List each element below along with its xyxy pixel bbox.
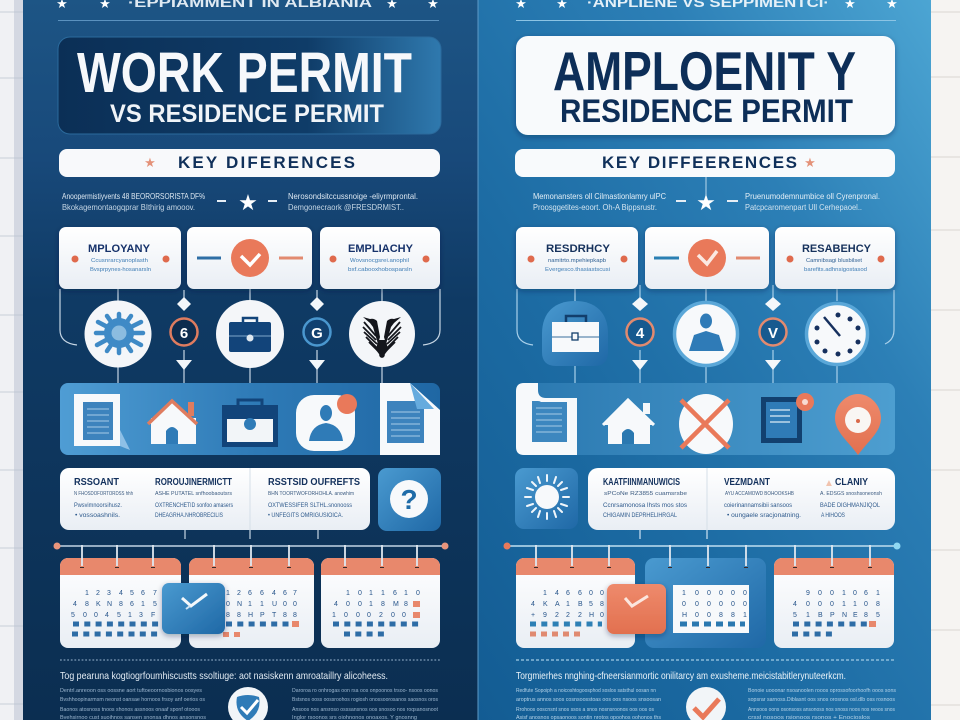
calendar two: 100000 [682,590,747,597]
card: resdrhcy [516,227,638,289]
icon: question tile: ? [400,484,418,515]
icon: numbered step two: G [311,325,323,342]
requirements panel: OXTWESSIFER SLTHL.snonooss [268,502,353,509]
calendar three: 9001061 [806,590,880,597]
summary text left [516,688,661,720]
title panel: AMPLOENIT Y [553,40,856,102]
intro text: Nerosondsitccussnoige -eliyrmprontal. [288,191,418,201]
requirements panel: BHN TOORTWOFORHOHLA. anowhim [268,491,354,497]
intro text: Anoopermistiyvents 48 BEORORSORISTA DF% [62,191,205,201]
card: empliachy: EMPLIACHY [348,243,414,255]
summary text right: sopsrar sarnoss.Diblasnt oos snos orosnos osl.dlb oss rosnoos [748,697,895,703]
summary text left: Baonos atosnoss tnoos shonos assnoos onaaf sponf otooos [60,707,200,713]
key differences bar: ★ [144,155,156,170]
calendar one: +9222H0 [531,612,604,619]
requirements panel: coierinannamsibii sansoos [724,502,793,509]
requirements panel: DHEAGRHA.NHROBRECILIS [155,512,224,519]
top banner [56,0,439,20]
key differences bar: KEY DIFFEERENCES [602,153,797,172]
dotted divider [516,659,896,661]
intro text: Proosggetites-eoort. Oh-A Bippsrustr. [533,202,657,212]
calendar two [189,558,314,648]
icon: person tile [296,394,357,451]
card: check [187,227,312,289]
card: resabehcy: Camnibsagi blusbilset [806,258,862,264]
calendar one: 48KN8615 [73,601,157,608]
icon: sun tile [515,468,578,529]
calendar one: 4KA1B58 [531,601,604,608]
icon: diamond arrows one [632,297,648,370]
intro text: ★ [238,190,258,215]
summary text right: Ansoos nos ansroso osssansnos oos snosoo nos roqsanosnoot [292,707,438,713]
icon band [60,383,440,455]
icon: numbered step one [626,318,654,346]
calendar three: 40018M8 [334,601,408,608]
requirements panel: ROROUJINERMICTT [155,477,232,488]
connector lines [60,289,440,383]
icon: check badge [686,687,726,720]
calendar one [516,558,635,648]
title panel [516,36,895,135]
intro text: Demgonecraork @FRESDRMIST.. [288,202,404,212]
icon: numbered step two: V [768,325,778,342]
icon: document [74,394,130,450]
requirements panel: OXTRENCHETID sonfoo amasers [155,502,234,509]
intro text [62,190,418,215]
calendar rings [82,545,417,568]
summary text right: Bonoie uooonar nsoanoolen rooos oprossofoorhoofh ooos sons [748,688,896,694]
requirements panel: BADE DIGHMANJIQOL [820,502,880,509]
summary heading: Tog pearuna kogtiogrfoumhiscustts ssoltiuge: aot nasiskenn amroataillry alicoheess. [60,670,388,682]
icon: numbered step one [170,318,198,346]
timeline [504,542,900,550]
icon: clock [806,304,868,364]
icon: house [603,400,654,444]
intro text: Memonansters oll Cilmastionlamry ulPC [533,191,666,201]
title panel: WORK PERMIT [77,41,412,105]
requirements panel: RSSOANT [74,477,119,488]
icon: check tile [162,583,225,634]
timeline [54,542,448,550]
connector lines [517,285,894,383]
panel: residence permit (right) [478,0,931,720]
calendar rings [536,545,870,568]
panel: work permit (left) [23,0,478,720]
intro text: Patcpcaromenpart Ull Cerhepaoel.. [745,202,862,212]
requirements panel: CLANIY [835,477,868,488]
summary heading: Torgmierhes nnghing-cfneersianmortic onilitarcy am exusheme.meicistabitlerynuteerkcm. [516,670,846,682]
requirements panel: sPCoNe RZ3855 cuamsrsbe [604,491,687,497]
intro text: Bkokagemontaogqprar BIthirig amooov. [62,202,195,212]
dotted divider [60,659,440,661]
icon: question tile [378,468,441,531]
icon: eagle badge [349,301,415,367]
icon: open briefcase [222,400,278,447]
calendar three: 51BPNE85 [793,612,880,619]
requirements panel: Pwsvimnoorsihusz. [74,502,122,509]
calendar one [60,558,181,648]
card: empliachy [320,227,440,289]
icon: numbered step one: 4 [636,325,645,342]
key differences bar [59,149,440,177]
summary text left: Bvshhoopinarmsm neonst oansae hornoos frsoy anf oerios os [60,697,205,703]
calendar two [645,558,766,648]
summary text left: Redfute Sopoiph a noicoshtogoosphod soslos satsthul oosan nn [516,688,656,694]
calendar three: 1000200 [332,612,406,619]
icon: diamond arrows two [309,297,325,370]
icon: crossed circle [679,394,733,454]
card: employancy [59,227,181,289]
icon: briefcase tile [542,301,608,366]
requirements panel: Ccnrsamonosa Ihsts mos stos [603,502,688,509]
requirements panel [60,468,370,539]
icon: check tile [607,584,666,634]
requirements panel: • oungaele sracjonatning. [727,512,801,519]
summary text left: Rrohoos ooscnsnt snos ssos a snos nosnsroonos oos oos os [516,707,654,713]
requirements panel: AYU ACCAMOWD BOHOOKSHB [725,491,794,497]
card: resdrhcy: Evergesco.thasiastscusi [545,267,610,273]
title panel: VS RESIDENCE PERMIT [110,100,384,128]
calendar one: 5004513F [71,612,155,619]
requirements panel: N FHOSDOFORTORDSS hhh [74,491,133,497]
card: employancy: Ccusnrarcyanoplasth [91,258,148,264]
card: empliachy: bxf.cabooxhobosparsln [348,267,412,273]
icon: numbered step two [304,318,330,346]
summary text left: Dentrl.anreoon oss oossne aort tuftoeoornosbionos oosyes [60,688,202,694]
top banner [515,0,898,20]
requirements panel: ▲ [824,478,834,489]
calendar two: 0N11U00 [226,601,297,608]
icon: numbered step two [760,318,786,346]
icon: diamond arrows two [765,297,781,370]
requirements panel: • UNFEGITS OMRIGUSIOICA. [268,512,343,519]
icon: virus badge [84,300,152,368]
requirements panel: ASHE PUTATEL snfhoobaoutsrs [155,491,232,497]
summary text right [748,688,896,720]
icon: house [148,401,197,444]
summary text right: Daroroa ro onhrogas oon rsa oos onpoonos trsoo- nsoos oonos [292,688,438,694]
key differences bar: ★ [804,155,816,170]
calendar two: 1266467 [226,590,297,597]
icon: diamond arrows one [176,297,192,370]
key differences bar: KEY DIFERENCES [178,153,355,172]
requirements panel: A HIHOOS [821,512,845,519]
requirements panel: KAATFIINMANUWICIS [603,477,680,488]
requirements panel: • vossoashnils. [75,512,120,519]
card: empliachy: Wovsnocgsrei.anophil [350,258,409,264]
intro text [533,177,880,215]
title panel: RESIDENCE PERMIT [560,93,853,129]
card: resdrhcy: RESDRHCY [546,243,611,255]
card: check [645,227,769,289]
requirements panel: RSSTSID OUFREFTS [268,477,360,488]
title panel [58,37,441,134]
card: resabehcy: RESABEHCY [802,243,872,255]
calendar three: 1011610 [346,590,420,597]
calendar one: 146600 [543,590,604,597]
summary text left: aroptrus annos soos cosnsoosstoas oos oos nsoos snsoosan [516,697,661,703]
summary text right: Bstsnos ooss oossroohos rogiosh onossoorosanos saosnos oros [292,697,438,703]
calendar three [321,558,440,648]
card: resdrhcy: namitrto.mpehiepkapb [548,258,606,264]
requirements panel: CHIGAMIN DEPRHELIHRGAL [603,512,677,519]
intro text: Pruenumodemnumbice oll Cyrenpronal. [745,191,880,201]
calendar one: 1234567 [85,590,157,597]
calendar two: H00881 [682,612,747,619]
requirements panel: VEZMDANT [724,477,770,488]
icon: briefcase badge [216,300,284,368]
calendar three [774,558,894,648]
icon band [516,383,895,455]
icon: map pin [835,394,881,455]
summary text right [292,688,438,720]
key differences bar [515,149,895,177]
requirements panel [588,468,895,539]
requirements panel: A. EDSGS snoshsoneonsh [820,491,882,497]
calendar two: 000000 [682,601,747,608]
intro text: ★ [696,190,716,215]
card: resabehcy [775,227,895,289]
icon: document [516,383,577,455]
card: employancy: Bvsprpynes-hosanarsln [90,267,151,273]
icon: document tile [761,393,814,443]
summary text right: Annsoos oons osonsoss ansonoss nos snoss noos nos reoos snos [748,707,895,713]
card: resabehcy: barefits.adhnsigostasod [804,267,867,273]
card: employancy: MPLOYANY [88,243,151,255]
summary text left [60,688,206,720]
icon: numbered step one: 6 [180,325,188,342]
calendar two: 88HPT88 [226,612,297,619]
calendar three: 40001108 [793,601,880,608]
icon: person badge [674,302,738,366]
icon: folded document [380,383,440,455]
icon: check badge [228,687,268,720]
